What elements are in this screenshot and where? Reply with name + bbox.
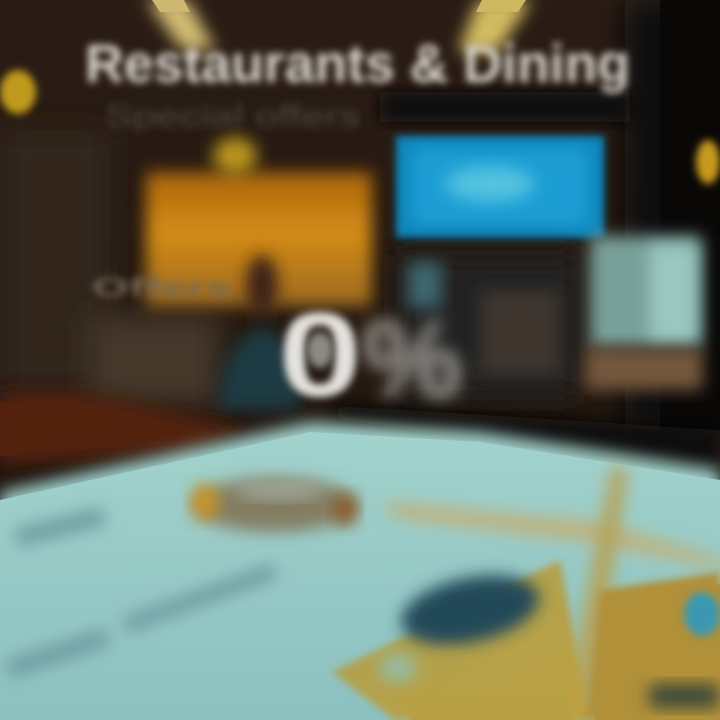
title: Restaurants & Dining <box>85 34 630 94</box>
subtitle: Special offers <box>105 100 360 133</box>
gold vertical strip <box>562 465 628 720</box>
object: pill-shaped oval on table <box>191 478 357 532</box>
big number: 0% <box>278 288 462 422</box>
gold strip across table <box>385 502 720 568</box>
panel: table with document <box>0 422 720 720</box>
card: gold bottom right <box>332 560 720 720</box>
panel: bright window <box>585 236 703 390</box>
person silhouette <box>218 255 300 410</box>
orange table edge <box>0 392 245 465</box>
panel: orange glowing wall <box>146 172 372 306</box>
zero ring: 0 <box>278 288 362 422</box>
ceiling lights <box>146 0 532 52</box>
dark ledge behind table <box>330 405 720 470</box>
text lines on document <box>6 507 278 678</box>
panel: dark back room <box>400 255 580 395</box>
label: left of orange panel: Offers <box>92 272 232 302</box>
zero centre <box>307 332 333 368</box>
lamp: left wall yellow <box>0 70 36 114</box>
lamp: right wall yellow <box>696 140 720 184</box>
panel: blue screen <box>396 136 604 238</box>
lamp: above orange panel <box>213 137 257 175</box>
percent sign: % <box>362 297 462 422</box>
